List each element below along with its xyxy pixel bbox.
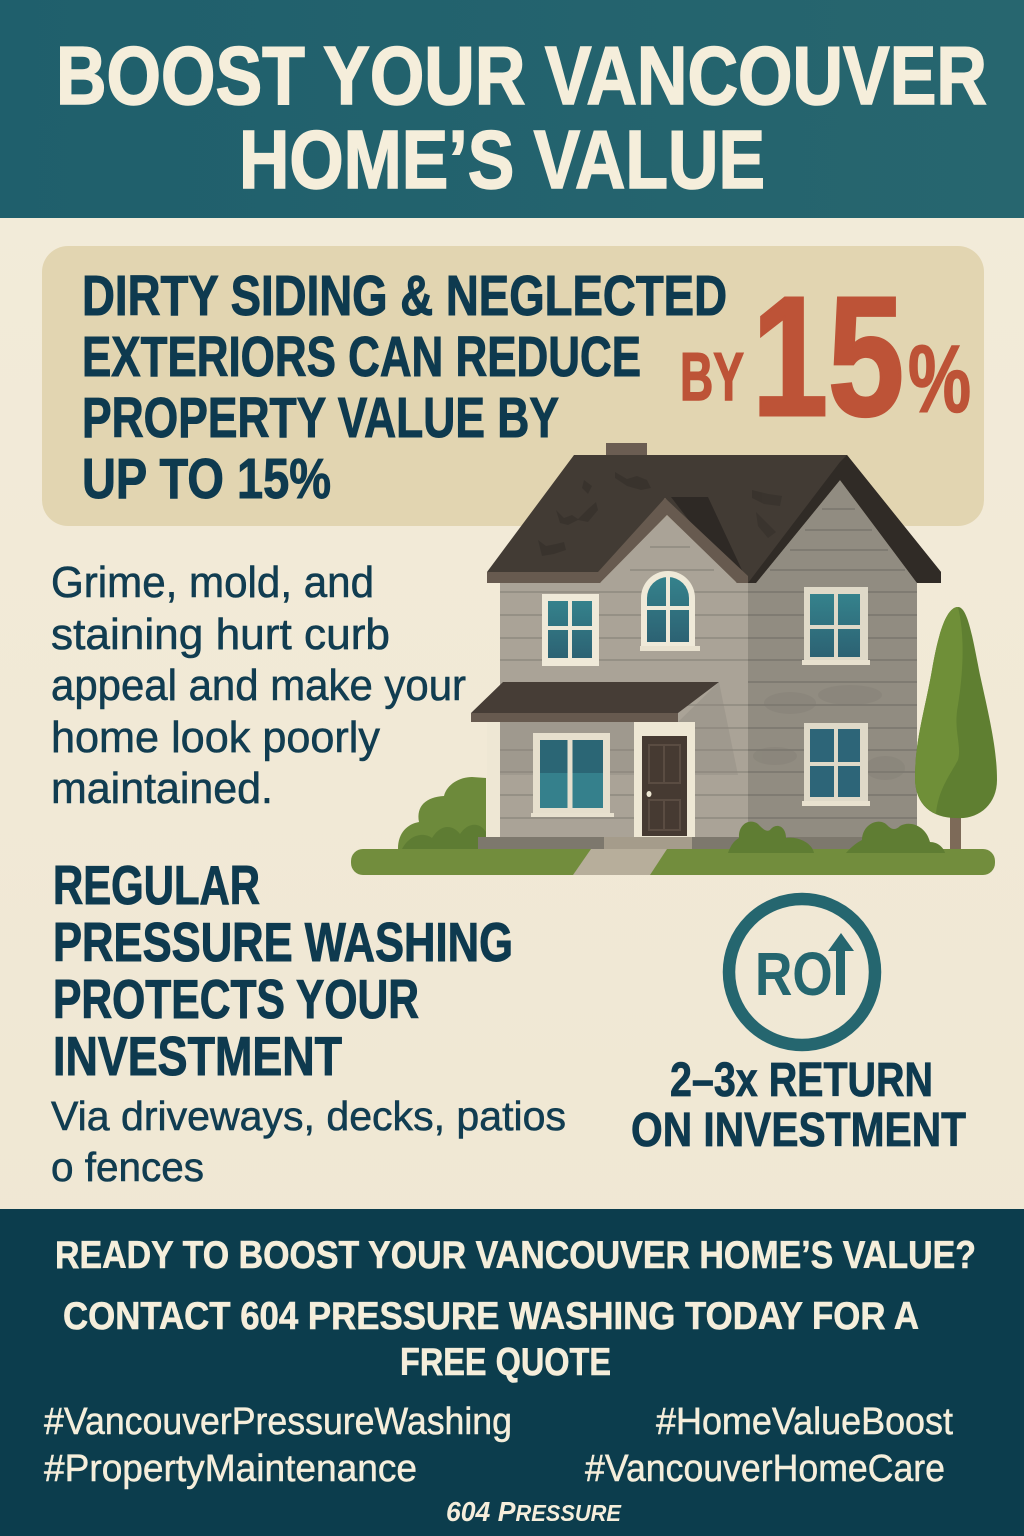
- left bush: [398, 777, 486, 849]
- text: services: Via driveways, decks, patios: [51, 1093, 566, 1139]
- hashtags: [44, 1401, 953, 1490]
- paragraph: curb appeal: appeal and make your: [51, 661, 466, 710]
- statistic: by 15%: %: [908, 326, 971, 433]
- callout: return on investment: ON INVESTMENT: [631, 1104, 966, 1157]
- call to action: [55, 1234, 976, 1384]
- illustration: house: [351, 443, 997, 875]
- arched window: [640, 571, 700, 651]
- roof moss stains: [538, 472, 782, 556]
- hashtags: #VancouverHomeCare: [585, 1448, 945, 1490]
- grime stains on wall: [753, 685, 905, 780]
- panel heading: PROPERTY VALUE BY: [82, 386, 559, 450]
- call to action: FREE QUOTE: [400, 1341, 611, 1384]
- panel heading: [82, 264, 727, 511]
- heading: regular pressure washing: PROTECTS YOUR: [53, 968, 419, 1030]
- upper left window: [542, 594, 599, 666]
- icon: up arrow: [828, 933, 854, 995]
- icon: ROI badge: ROI: [755, 940, 847, 1008]
- upper wall left: [500, 515, 748, 837]
- paragraph: curb appeal: Grime, mold, and: [51, 558, 374, 607]
- call to action: CONTACT 604 PRESSURE WASHING TODAY FOR A: [63, 1295, 919, 1338]
- callout: return on investment: 2–3x RETURN: [670, 1054, 933, 1107]
- paragraph: curb appeal: maintained.: [51, 764, 273, 813]
- right bush: [846, 822, 945, 853]
- hashtags: #VancouverPressureWashing: [44, 1401, 512, 1443]
- paragraph: curb appeal: home look poorly: [51, 713, 380, 762]
- statistic: by 15%: [680, 262, 971, 452]
- main roof: [487, 455, 941, 583]
- hashtags: #PropertyMaintenance: [44, 1448, 417, 1490]
- panel heading: UP TO 15%: [82, 447, 331, 511]
- lower left window: [531, 733, 614, 817]
- foundation: [478, 837, 917, 849]
- upper right window: [802, 587, 870, 665]
- siding lines: [500, 509, 917, 818]
- heading: regular pressure washing: INVESTMENT: [53, 1025, 342, 1087]
- title: [56, 29, 987, 206]
- front door: [634, 722, 695, 837]
- heading: regular pressure washing: REGULAR: [53, 854, 260, 916]
- paragraph: curb appeal: staining hurt curb: [51, 610, 390, 659]
- porch roof: [471, 682, 719, 722]
- text: services: [51, 1093, 566, 1190]
- upper wall right: [748, 480, 917, 837]
- dormer valley: [671, 497, 748, 583]
- front path: [573, 849, 667, 875]
- middle bush: [728, 822, 814, 853]
- porch post: [487, 722, 500, 837]
- porch shadow: [500, 682, 738, 775]
- header banner: [0, 0, 1024, 218]
- gable trim: [487, 498, 748, 583]
- lawn: [351, 849, 995, 875]
- statistic: by 15%: BY: [680, 339, 744, 415]
- brand name: 604 PRESSURE: [446, 1496, 622, 1527]
- heading: regular pressure washing: [53, 854, 513, 1087]
- statistic: by 15%: 15: [752, 262, 904, 452]
- footer panel: [0, 1209, 1024, 1536]
- heading: regular pressure washing: PRESSURE WASHING: [53, 911, 513, 973]
- text: services: o fences: [51, 1144, 204, 1190]
- callout: return on investment: [631, 1054, 966, 1157]
- panel: property value warning: [42, 246, 984, 526]
- paragraph: curb appeal: [51, 558, 466, 813]
- tree: [915, 607, 997, 850]
- icon: ROI badge: [729, 899, 875, 1045]
- roof right edge: [748, 455, 941, 583]
- panel heading: DIRTY SIDING & NEGLECTED: [82, 264, 727, 328]
- panel heading: EXTERIORS CAN REDUCE: [82, 325, 641, 389]
- title: HOME’S VALUE: [239, 113, 765, 206]
- chimney: [606, 443, 647, 456]
- hashtags: #HomeValueBoost: [656, 1401, 953, 1443]
- lower right window: [802, 723, 870, 806]
